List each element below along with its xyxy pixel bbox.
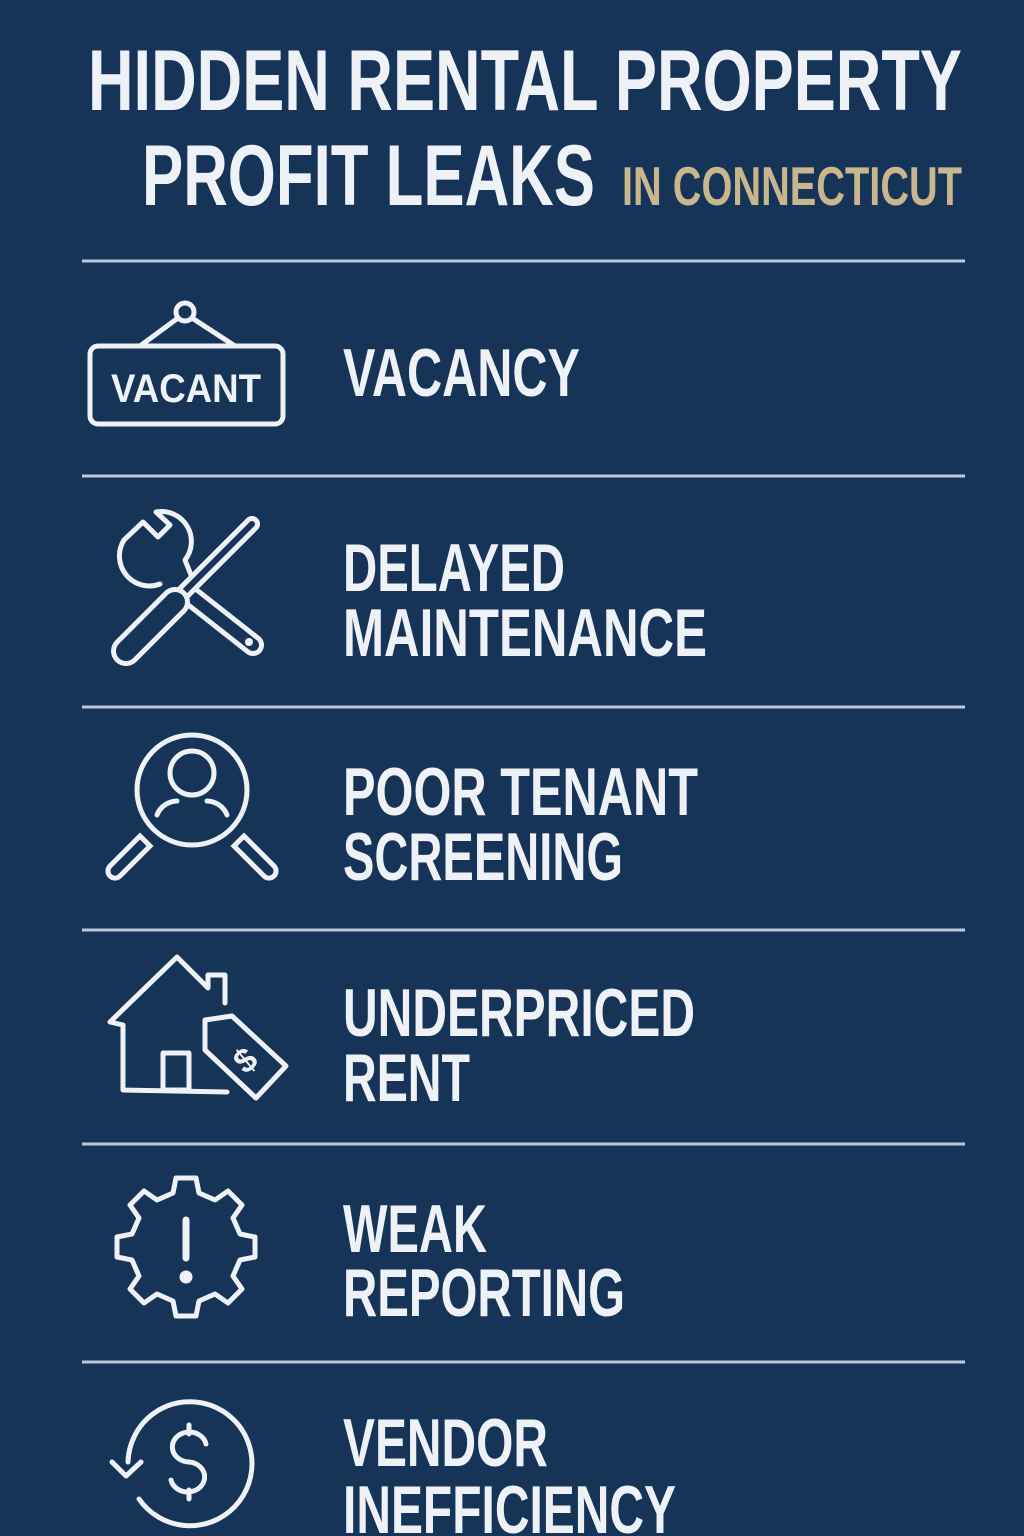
title: PROFIT LEAKS	[142, 128, 595, 224]
label: weak reporting: REPORTING	[343, 1255, 625, 1331]
icon: house price tag	[110, 957, 286, 1098]
label: weak reporting	[343, 1191, 625, 1331]
icon: tools	[119, 512, 253, 651]
label: underpriced rent: RENT	[343, 1040, 470, 1116]
icon: gear warning	[117, 1178, 255, 1316]
label: poor tenant screening: POOR TENANT	[343, 754, 698, 830]
label: weak reporting: WEAK	[343, 1191, 487, 1267]
label: delayed maintenance: MAINTENANCE	[343, 595, 707, 671]
icon: magnifier person	[108, 735, 276, 878]
icon: dollar cycle	[112, 1402, 252, 1526]
icon: vacant sign: VACANT	[111, 367, 261, 411]
title	[88, 33, 962, 224]
label: delayed maintenance	[343, 530, 707, 671]
label: vacancy: VACANCY	[343, 335, 580, 411]
label: underpriced rent	[343, 975, 695, 1116]
label: vendor inefficiency	[343, 1405, 676, 1536]
label: vendor inefficiency: VENDOR	[343, 1405, 548, 1481]
label: underpriced rent: UNDERPRICED	[343, 975, 695, 1051]
label: delayed maintenance: DELAYED	[343, 530, 565, 606]
icon: house price tag: $	[226, 1040, 265, 1081]
label: poor tenant screening	[343, 754, 698, 895]
label: poor tenant screening: SCREENING	[343, 819, 623, 895]
icon: vacant sign	[90, 303, 283, 424]
